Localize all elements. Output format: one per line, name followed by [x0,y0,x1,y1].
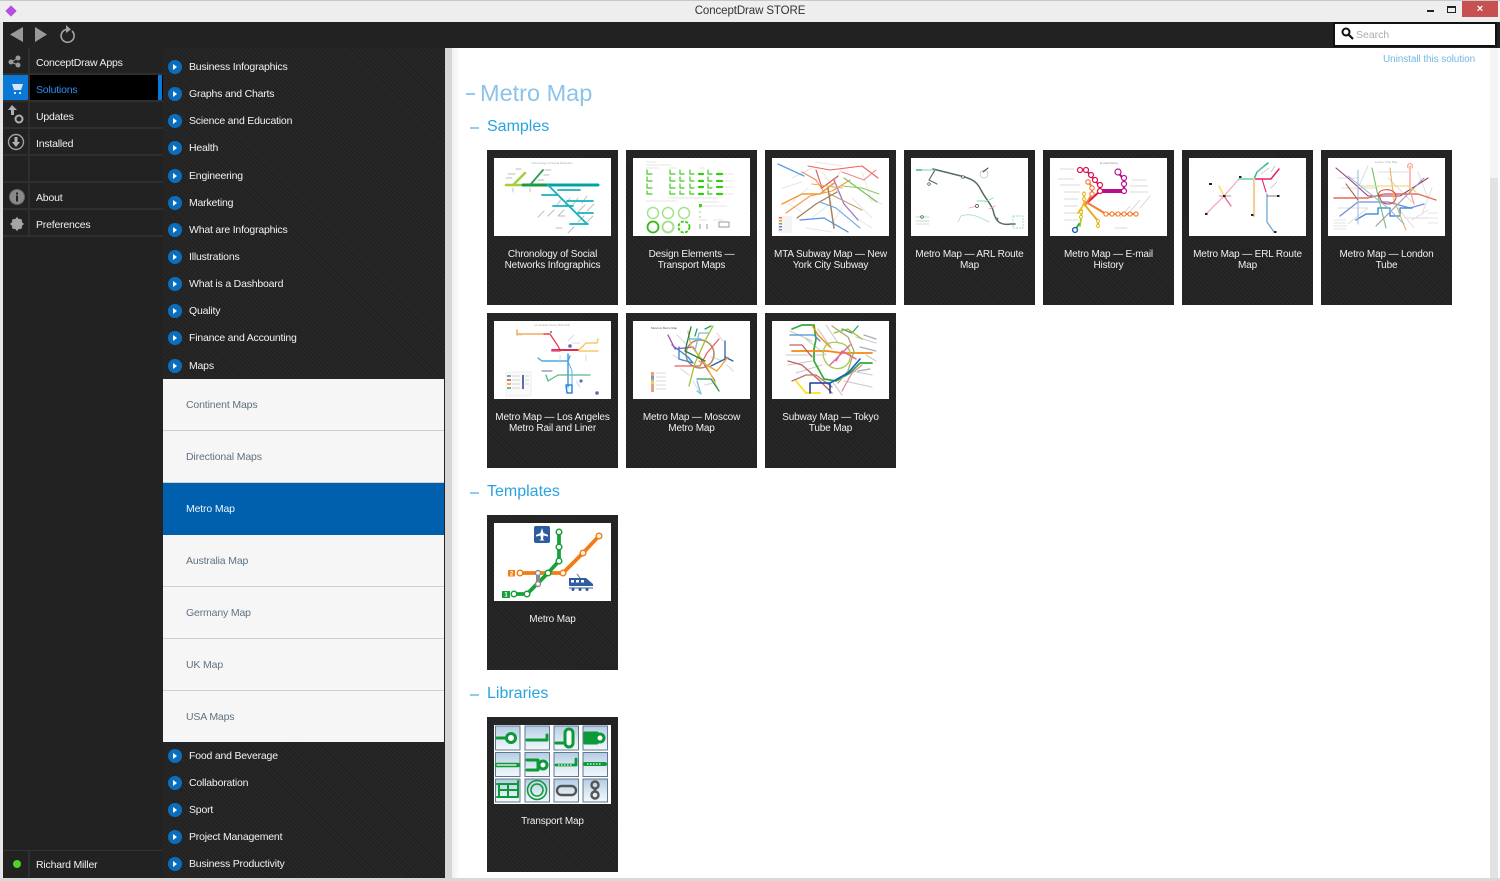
heading: Libraries: Libraries [487,685,548,702]
thumbnail: email history: E-mail history [1100,161,1119,165]
caption: Metro Map — London Tube [1339,249,1434,271]
submenu: Directional Maps [163,431,444,483]
thumbnail: design elements [633,158,750,236]
caption: Metro Map — E-mail History [1064,249,1153,271]
nav: ConceptDraw Apps: ConceptDraw Apps [36,57,123,69]
icon: forward arrow [35,27,47,42]
thumbnail: metro template: 1 [504,593,508,599]
category: Collaboration [168,776,248,790]
submenu: USA Maps: USA Maps [186,711,234,723]
nav: Installed: Installed [36,138,73,150]
submenu: Continent Maps [163,379,444,431]
window frame bottom [0,878,1500,881]
caption: MTA Subway Map — New York City Subway [774,249,887,271]
heading: Samples: Samples [487,118,549,135]
category: Sport [168,803,214,817]
thumbnail: Moscow metro [633,321,750,399]
caption: Subway Map — Tokyo Tube Map [782,412,879,434]
category: Science and Education: Science and Education [189,115,292,127]
category: Health: Health [189,142,218,154]
window frame left [0,22,3,881]
thumbnail: Moscow metro: Moscow Metro Map [651,326,678,330]
category: Marketing [168,196,233,210]
nav: Preferences [3,210,163,237]
samples section dash [470,127,479,129]
card: Design Elements Transport Maps [626,150,757,305]
caption: Transport Map [521,816,584,827]
content shadow edge [452,48,460,878]
category: Illustrations [168,250,240,264]
card: Metro Map Moscow [626,313,757,468]
category: Business Infographics: Business Infographics [189,61,288,73]
thumbnail: London tube [1328,158,1445,236]
card: MTA Subway Map [765,150,896,305]
submenu: Australia Map [163,535,444,587]
category: What is a Dashboard: What is a Dashboard [189,278,283,290]
submenu: Continent Maps: Continent Maps [186,399,257,411]
card: Subway Map Tokyo [765,313,896,468]
submenu: Germany Map [163,587,444,639]
nav: blank row [3,156,163,183]
nav: Installed [3,129,163,156]
category: Engineering [168,169,243,183]
thumbnail: Los Angeles metro [494,321,611,399]
left navigation panel [3,48,163,878]
nav: About [3,183,163,210]
caption: Metro Map — Moscow Metro Map [643,412,740,434]
uninstall link: Uninstall this solution [1383,54,1475,65]
card: Metro Map E-mail History [1043,150,1174,305]
category: Engineering: Engineering [189,170,243,182]
nav: ConceptDraw Apps [3,48,163,75]
icon: back arrow [10,27,23,42]
category: Maps: Maps [189,360,214,372]
nav: user Richard Miller: Richard Miller [36,859,97,871]
search placeholder: Search [1356,29,1389,41]
window title: ConceptDraw STORE [695,5,805,17]
submenu: Metro Map selected: Metro Map [186,503,235,515]
nav: Solutions selected [3,75,163,102]
submenu: UK Map [163,639,444,691]
thumbnail: email history [1050,158,1167,236]
nav: About: About [36,192,62,204]
category: Food and Beverage [168,749,278,763]
nav: user Richard Miller [3,850,163,878]
thumbnail: metro template: 2 [510,572,514,578]
category: Quality: Quality [189,305,220,317]
submenu: Directional Maps: Directional Maps [186,451,262,463]
icon: application diamond [5,5,17,17]
thumbnail: metro template [494,523,611,601]
card: Metro Map ARL Route Map [904,150,1035,305]
caption: Metro Map — Los Angeles Metro Rail and Liner [495,412,610,434]
caption: Metro Map — ARL Route Map [915,249,1024,271]
category: Maps [168,359,214,373]
templates section dash [470,492,479,494]
heading: Templates: Templates [487,483,560,500]
caption: Design Elements — Transport Maps [649,249,734,271]
card: Metro Map London Tube [1321,150,1452,305]
category: What are Infographics: What are Infographics [189,224,288,236]
main scrollbar [1490,48,1498,878]
submenu: UK Map: UK Map [186,659,223,671]
nav: Solutions selected: Solutions [36,84,77,96]
icon: minimize [1427,10,1434,12]
nav: Updates: Updates [36,111,74,123]
sidebar scrollbar [444,48,452,878]
close button [1462,1,1498,17]
libraries section dash [470,694,479,696]
thumbnail: London tube: London Tube Map [1375,160,1398,164]
category: Project Management: Project Management [189,831,282,843]
submenu: Metro Map selected [163,483,444,535]
category: Illustrations: Illustrations [189,251,240,263]
nav: Updates [3,102,163,129]
thumbnail: MTA subway map [772,158,889,236]
thumbnail: chronology map [494,158,611,236]
category: Project Management [168,830,282,844]
search box [1333,22,1497,47]
card: Metro Map template [487,515,618,670]
category: Collaboration: Collaboration [189,777,248,789]
thumbnail: ERL route [1189,158,1306,236]
icon: maximize [1447,6,1456,13]
category: Graphs and Charts: Graphs and Charts [189,88,274,100]
thumbnail: chronology map: Chronology of Social Networks [531,161,573,165]
submenu: Germany Map: Germany Map [186,607,251,619]
card: Metro Map Los Angeles [487,313,618,468]
title bar [0,0,1500,22]
nav: Preferences: Preferences [36,219,90,231]
category: Business Productivity: Business Productivity [189,858,285,870]
category: Graphs and Charts [168,87,274,101]
close button: × [1477,3,1483,15]
title text: Metro Map [480,80,592,106]
thumbnail: transport map library icons [494,725,611,804]
toolbar [3,22,1500,48]
submenu: Australia Map: Australia Map [186,555,248,567]
category panel [163,48,444,878]
thumbnail: Tokyo metro [772,321,889,399]
card: Metro Map ERL Route Map [1182,150,1313,305]
thumbnail: ARL route [911,158,1028,236]
card: Transport Map library [487,717,618,872]
caption: Metro Map — ERL Route Map [1193,249,1302,271]
category: Sport: Sport [189,804,213,816]
category: Food and Beverage: Food and Beverage [189,750,278,762]
icon: magnifier [1342,28,1354,40]
icon: refresh [60,25,75,44]
caption: Chronology of Social Networks Infographics [505,249,600,271]
card: Chronology of Social Networks Infographics [487,150,618,305]
category: Marketing: Marketing [189,197,233,209]
category: Finance and Accounting: Finance and Accounting [189,332,297,344]
caption: Metro Map [529,614,576,625]
thumbnail: Los Angeles metro: Los Angeles County Metro Rail [534,323,570,327]
category: Quality [168,304,220,318]
submenu: USA Maps [163,691,444,742]
category: Health [168,141,218,155]
